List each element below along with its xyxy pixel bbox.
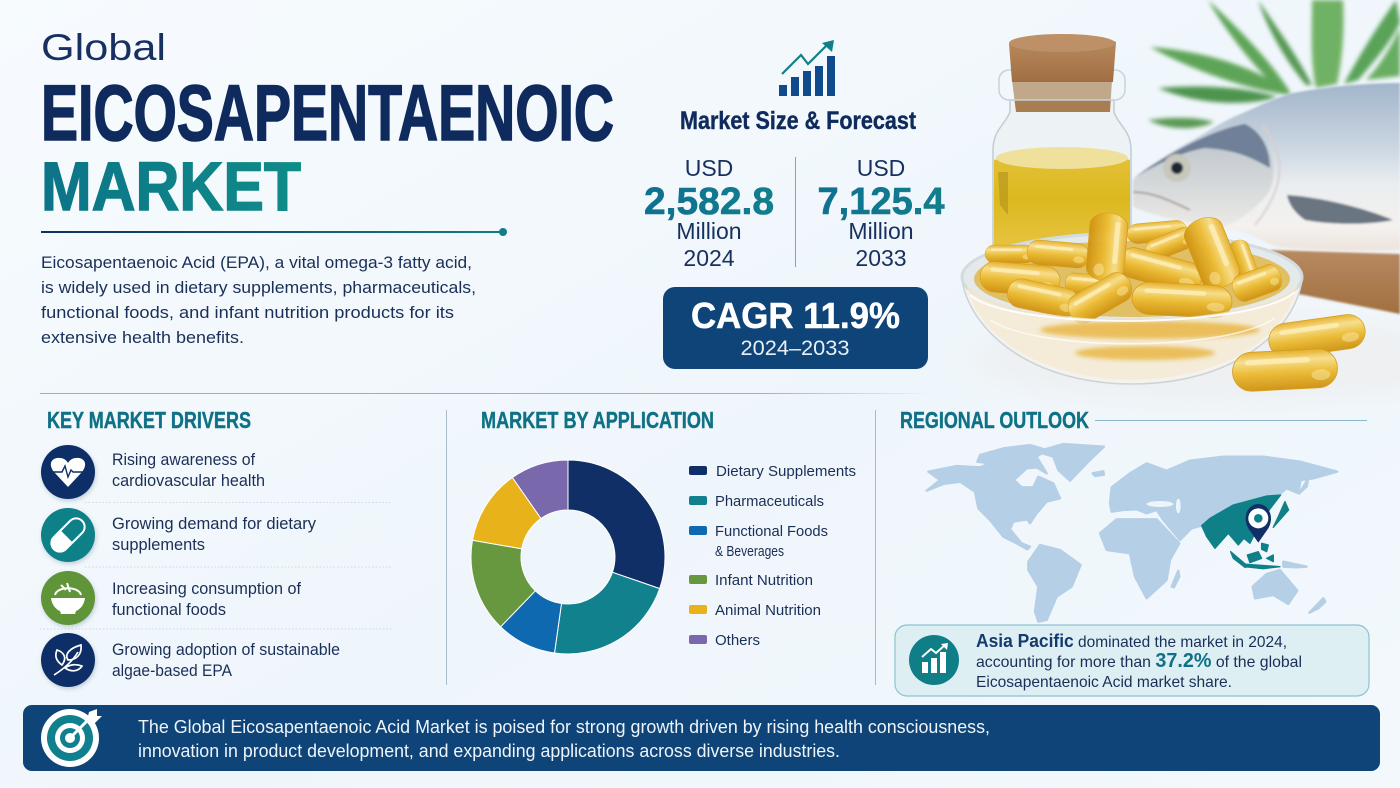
CAGR callout — [663, 287, 928, 369]
stat: 2024 market size: 2,582.8 — [644, 181, 774, 223]
jar — [993, 34, 1131, 245]
stat divider — [795, 157, 796, 267]
legend: Functional Foods — [715, 524, 828, 540]
heading: REGIONAL OUTLOOK — [900, 407, 1089, 433]
table surface — [970, 318, 1400, 402]
icon: target — [41, 709, 102, 767]
heading: KEY MARKET DRIVERS — [47, 407, 251, 433]
legend: & Beverages — [715, 544, 784, 560]
heading: MARKET BY APPLICATION — [481, 407, 714, 433]
stat: 2033 market forecast: 7,125.4 — [818, 181, 944, 223]
driver text: algae-based EPA: Growing adoption of sustainable — [112, 641, 340, 659]
loose capsules — [1267, 312, 1367, 360]
panel: market by application — [471, 407, 856, 654]
icon: leaves — [41, 633, 95, 687]
stat: 2024 market size — [644, 155, 774, 271]
palm leaves — [1148, 0, 1400, 128]
banner text: innovation in product development, and expanding applications across diverse industries. — [138, 741, 840, 761]
callout text: accounting for more than 37.2% of the global — [976, 650, 1302, 672]
driver text: cardiovascular health: cardiovascular health — [112, 472, 265, 490]
icon: growth chart — [779, 40, 835, 96]
intro text: is widely used in dietary supplements, pharmaceuticals, — [41, 278, 476, 297]
driver text: functional foods: Increasing consumption of — [112, 580, 301, 598]
map pin — [1246, 504, 1271, 543]
panel: key market drivers — [40, 407, 393, 687]
intro text: extensive health benefits. — [41, 328, 244, 347]
driver text: dietary supplements: supplements — [112, 536, 205, 554]
icon: capsule — [41, 508, 95, 562]
cork — [1012, 80, 1112, 112]
driver text: algae-based EPA: algae-based EPA — [112, 662, 232, 680]
CAGR callout: 2024–2033 — [740, 337, 850, 360]
driver text: functional foods — [112, 580, 301, 619]
callout text: Asia Pacific dominated the market in 2024, — [976, 631, 1287, 651]
stat: 2033 market forecast — [818, 155, 944, 271]
driver text: cardiovascular health — [112, 451, 265, 490]
driver text: functional foods: functional foods — [112, 601, 226, 619]
callout text: Eicosapentaenoic Acid market share. — [976, 674, 1232, 691]
legend: Pharmaceuticals — [715, 494, 824, 510]
title: EICOSAPENTAENOIC — [41, 68, 614, 157]
title: Global — [41, 27, 166, 68]
heading: market size and forecast: Market Size & Forecast — [680, 107, 917, 135]
capsule bowl — [962, 211, 1302, 384]
driver text: algae-based EPA — [112, 641, 340, 680]
icon: heart — [41, 445, 95, 499]
donut chart — [471, 460, 665, 654]
intro text: Eicosapentaenoic Acid (EPA), a vital omega-3 fatty acid, — [41, 253, 472, 272]
fish — [1132, 83, 1400, 251]
photo: fish oil bottle, salmon and capsules — [962, 0, 1400, 402]
highlighted region: Asia Pacific — [1202, 495, 1289, 569]
title underline — [41, 228, 507, 236]
legend: Animal Nutrition — [715, 603, 821, 619]
intro text: functional foods, and infant nutrition products for its — [41, 303, 454, 322]
stat: 2033 market forecast: USD — [857, 155, 905, 181]
board — [1270, 250, 1400, 314]
callout text — [976, 631, 1302, 691]
banner text — [138, 717, 990, 761]
legend: Infant Nutrition — [715, 573, 813, 589]
regional callout — [895, 625, 1369, 696]
driver text: dietary supplements: Growing demand for dietary — [112, 515, 317, 533]
driver text: dietary supplements — [112, 515, 317, 554]
legend: Others — [715, 633, 760, 649]
legend: Dietary Supplements — [716, 464, 856, 480]
stat: 2033 market forecast: 2033 — [855, 245, 907, 271]
driver text: cardiovascular health: Rising awareness of — [112, 451, 255, 469]
banner text: The Global Eicosapentaenoic Acid Market is poised for strong growth driven by rising health consciousness, — [138, 717, 990, 737]
world map — [927, 444, 1337, 622]
icon: bowl — [41, 571, 95, 625]
bottom banner — [23, 705, 1380, 771]
icon: growth — [909, 635, 959, 685]
intro text — [41, 253, 476, 347]
panel: regional outlook — [895, 407, 1369, 696]
stat: 2024 market size: USD — [685, 155, 733, 181]
title: MARKET — [41, 148, 301, 225]
stat: 2024 market size: 2024 — [683, 245, 735, 271]
stat: 2033 market forecast: Million — [848, 218, 914, 244]
stat: 2024 market size: Million — [676, 218, 742, 244]
CAGR callout: CAGR 11.9% — [691, 295, 900, 336]
legend — [689, 464, 856, 649]
title — [41, 27, 614, 225]
